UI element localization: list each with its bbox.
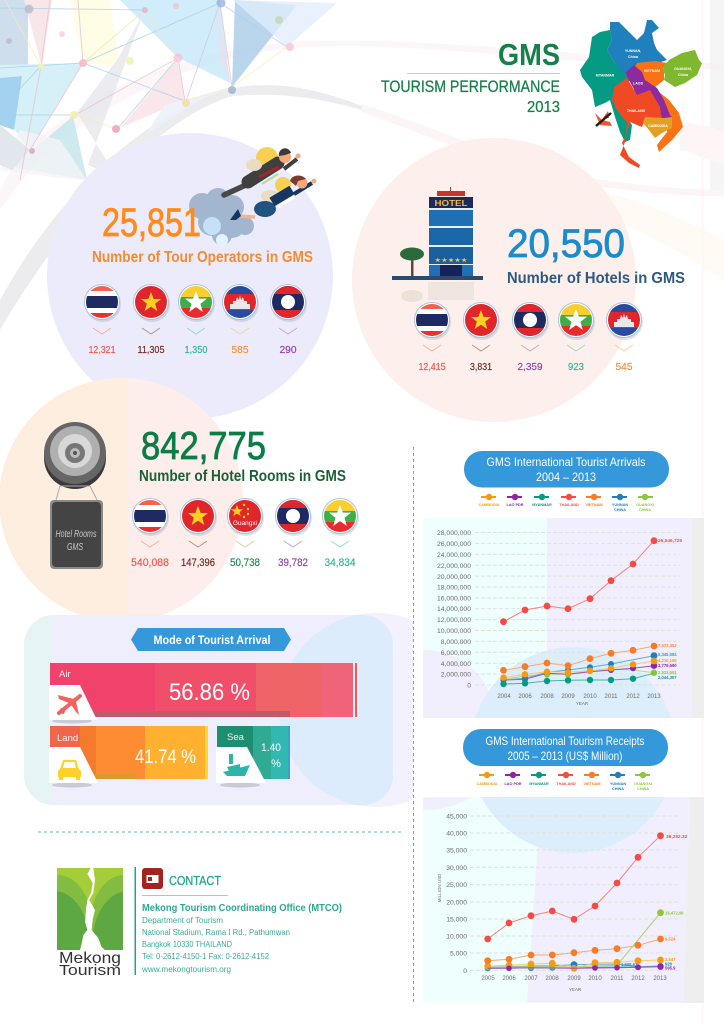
line chart: tourism receipts: 595.9 [665,966,676,970]
legend: tourist arrivals: GUANGXI [636,503,654,507]
title block: GMS [498,37,560,72]
icon: plane [58,695,80,715]
map of the GMS: CAMBODIA [648,124,668,128]
legend: tourism receipts: CHINA [612,787,624,791]
panel: contact [134,867,342,975]
line chart: tourist arrivals: 22,000,000 [437,563,471,570]
bar: land [49,726,208,788]
legend: tourism receipts [477,772,652,791]
series: Cambodia [500,658,657,681]
line chart: tourism receipts: 25,000 [446,882,467,889]
line chart: tourist arrivals: 4,210,165 [658,658,677,663]
illustration: hotel building: HOTEL [434,198,468,208]
line chart: tourist arrivals: 8,000,000 [441,639,471,646]
illustration: hanging hotel rooms sign: GMS [67,542,83,553]
line chart: tourism receipts: MILLION USD [437,873,442,902]
contact details: National Stadium, Rama I Rd., Pathumwan [142,927,290,937]
line chart: tourist arrivals: 2012 [626,694,640,700]
illustration: hanging hotel rooms sign: Hotel Rooms [56,529,96,540]
Vietnam: 11,305 [138,344,165,356]
line chart: tourist arrivals: 12,000,000 [437,617,471,624]
circle: hotels background [352,138,636,422]
line chart: tourist arrivals: YEAR [576,701,589,706]
hotel rooms total: 842,775 [141,425,266,468]
line chart: tourist arrivals: 2,000,000 [441,672,471,678]
Vietnam [180,498,217,569]
contact details: Bangkok 10330 THAILAND [142,939,232,949]
heading: tourism receipts: 2005 – 2013 (US$ Million) [508,749,622,763]
map of the GMS: VIETNAM [644,69,660,73]
logo: Mekong Tourism: Mekong [59,950,121,967]
line chart: tourism receipts: 1,608.61 [621,962,638,967]
series: Myanmar [500,673,654,687]
panel: mode of tourist arrival [24,613,413,807]
contact details [141,902,342,974]
line chart: tourist arrivals: 2,533,691 [658,670,677,675]
contact details: Tel: 0-2612-4150-1 Fax: 0-2612-4152 [142,951,269,961]
legend: tourist arrivals: MYANMAR [532,503,552,507]
panel: tour operators [84,201,313,356]
panel: tourism receipts background [423,797,704,1003]
panel: hotel rooms [131,425,359,569]
legend: tourist arrivals: CHINA [639,508,651,512]
bar: sea: Sea [227,732,245,743]
map of the GMS: LAOS [633,82,644,86]
line chart: tourist arrivals: 2013 [647,694,661,700]
Cambodia [606,302,643,373]
Laos [276,498,312,569]
line chart: tourism receipts: 2013 [653,976,667,982]
bar: land: 41.74 % [135,747,196,768]
line chart: tourism receipts: 2011 [611,976,624,982]
contact heading: CONTACT [169,873,221,888]
line chart: tourism receipts: 2009 [567,976,581,982]
title block [381,37,560,116]
contact details: Mekong Tourism Coordinating Office (MTCO) [142,902,342,914]
series: Guangxi [485,909,664,970]
line chart: tourist arrivals: 6,000,000 [441,650,471,657]
illustration: flying business people on cloud [189,147,316,246]
Laos [512,302,549,373]
map of the GMS: YUNNAN, [625,49,641,53]
line chart: tourism receipts: 5,000 [450,950,467,958]
Myanmar: 923 [568,361,584,373]
legend: tourist arrivals: LAO PDR [506,503,524,507]
hotels total: 20,550 [507,222,625,266]
line chart: tourist arrivals: 7,572,352 [658,643,677,648]
line chart: tourism receipts: 9,524 [665,936,676,942]
line chart: tourist arrivals: 2009 [561,694,575,700]
Myanmar [178,284,215,356]
series: Lao PDR [500,662,657,683]
legend: tourism receipts: LAO PDR [504,782,522,786]
circle: tour operators background [47,133,333,419]
heading: tourist arrivals: 2004 – 2013 [536,470,596,484]
legend: tourism receipts: YUNNAN [610,782,626,786]
heading: tourism receipts [463,729,668,766]
Cambodia [222,284,259,356]
legend: tourist arrivals: VIETNAM [585,503,603,507]
map of the GMS: China [628,55,639,59]
legend: tourism receipts: VIETNAM [583,782,601,786]
line chart: tourist arrivals: 3,779,690 [658,663,677,668]
bar: sea: % [271,758,281,770]
title block: TOURISM PERFORMANCE [381,78,560,96]
line chart: tourism receipts: 15,000 [446,916,467,924]
line chart: tourism receipts: 2010 [588,976,602,982]
Vietnam [464,302,500,373]
Laos: 2,359 [518,361,543,373]
legend: tourist arrivals: YUNNAN [612,503,628,507]
line chart: tourist arrivals: 0 [467,682,471,690]
line chart: tourism receipts: 2,547 [665,957,676,962]
Thailand [84,284,121,356]
line chart: tourist arrivals: 2011 [605,694,618,700]
series: Vietnam [484,936,664,964]
Guangxi: 50,738 [230,557,260,569]
line chart: tourism receipts: 39,252.32 [666,834,688,840]
legend: tourism receipts: MYANMAR [529,782,549,786]
logo: Mekong Tourism: Tourism [59,962,121,979]
map of the GMS [580,20,702,168]
Thailand: 540,088 [131,557,169,569]
bar: sea [216,726,290,788]
line chart: tourism receipts: 2012 [631,976,645,982]
line chart: tourist arrivals: 26,000,000 [437,541,471,548]
line chart: tourist arrivals: 2004 [497,694,511,700]
Cambodia: 585 [232,344,249,356]
panel: hotels [414,222,685,373]
series: Guangxi [500,666,657,682]
legend: tourism receipts: GUANGXI [634,782,652,786]
Myanmar [322,498,359,569]
line chart: tourist arrivals: 18,000,000 [437,584,471,592]
line chart: tourist arrivals: 2008 [540,694,554,700]
bar: air: Air [59,669,71,680]
heading: tourism receipts: GMS International Tourism Receipts [486,734,644,748]
line chart: tourist arrivals: 28,000,000 [437,530,471,537]
heading: tourist arrivals: GMS International Tourist Arrivals [486,455,646,469]
illustration: hotel building: ★★★★★ [434,257,468,264]
line chart: tourism receipts: 0 [463,968,467,975]
heading banner: Mode of Tourist Arrival [154,633,270,647]
series: Thailand [484,832,664,942]
series: Lao PDR [488,964,664,971]
title block: 2013 [527,99,560,116]
line chart: tourism receipts: 2006 [502,976,516,982]
Vietnam [134,284,170,356]
line chart: tourism receipts: 40,000 [446,830,467,838]
Guangxi [228,498,264,569]
contact details: Department of Tourism [142,915,223,925]
Laos: 39,782 [278,557,308,569]
illustration: hotel building [392,187,483,302]
line chart: tourism receipts: 2008 [545,976,559,982]
series: Thailand [500,537,657,625]
line chart: tourism receipts: 926 [665,962,673,966]
line chart: tourism receipts: 20,000 [446,900,467,906]
Cambodia: 545 [616,361,633,373]
line chart: tourist arrivals: 4,000,000 [441,661,471,668]
icon: contact card [142,868,163,889]
line chart: tourism receipts: 45,000 [446,814,467,820]
line chart: tourism receipts: 16,472.96 [665,910,684,916]
series: Myanmar [485,964,660,971]
line chart: tourist arrivals [437,530,682,706]
map of the GMS: GUANGXI, [674,67,692,71]
contact details: www.mekongtourism.org [141,964,231,974]
icon: ship [223,754,250,776]
icon: car [58,760,81,780]
panel: tourist arrivals background [423,518,704,718]
legend: tourist arrivals: CHINA [614,508,626,512]
Guangxi: Guangxi [233,520,257,527]
Laos [270,284,307,356]
series: Vietnam [500,643,657,674]
Myanmar: 1,350 [184,344,208,356]
illustration: hanging hotel rooms sign [44,422,106,569]
logo: Mekong Tourism [57,868,123,975]
Thailand [131,498,169,569]
line chart: tourist arrivals: 24,000,000 [437,552,471,559]
circle: hotel rooms background [0,378,243,622]
line chart: tourism receipts: 2005 [481,976,495,982]
line chart: tourist arrivals: 16,000,000 [437,596,471,602]
Myanmar [558,302,595,373]
Thailand: 12,321 [88,344,116,356]
Thailand [414,302,451,373]
series: Yunnan [488,961,664,969]
bar: land: Land [57,733,78,744]
tour operators total: 25,851 [102,201,201,245]
icon: airplane on map [595,111,612,126]
legend: tourism receipts: CAMBODIA [477,782,498,786]
tour operators heading: Number of Tour Operators in GMS [92,249,313,266]
legend: tourist arrivals: THAILAND [559,503,579,507]
bar: air [49,663,357,724]
legend: tourism receipts: CHINA [637,787,649,791]
Vietnam: 147,396 [181,557,215,569]
line chart: tourist arrivals: 5,345,084 [658,652,677,657]
series: Yunnan [500,652,657,683]
heading: tourist arrivals [464,451,669,488]
legend: tourism receipts: THAILAND [556,782,576,786]
Myanmar: 34,834 [324,557,356,569]
legend: tourist arrivals: CAMBODIA [479,503,500,507]
hotels heading: Number of Hotels in GMS [507,270,685,287]
line chart: tourist arrivals: 26,546,725 [658,538,682,544]
hotel rooms heading: Number of Hotel Rooms in GMS [139,468,346,485]
map of the GMS: China [678,73,689,77]
Laos: 290 [280,344,297,356]
bar: air: 56.86 % [169,679,250,706]
series: Cambodia [484,957,664,972]
line chart: tourist arrivals: 2006 [518,694,532,700]
Thailand: 12,415 [418,361,446,373]
map of the GMS: MYANMAR [596,74,615,78]
line chart: tourist arrivals: 14,000,000 [437,606,471,613]
line chart: tourism receipts: 35,000 [446,848,467,854]
Vietnam: 3,831 [470,361,492,373]
network lines and nodes [0,0,294,180]
map of the GMS: THAILAND [627,109,646,113]
line chart: tourist arrivals: 2,044,307 [658,675,677,680]
line chart: tourist arrivals: 2010 [583,694,597,700]
line chart: tourism receipts: 30,000 [446,865,467,872]
bar: sea: 1.40 [261,742,281,754]
line chart: tourist arrivals: 10,000,000 [437,628,471,635]
line chart: tourism receipts: 10,000 [446,934,467,940]
line chart: tourism receipts: YEAR [569,987,582,992]
line chart: tourist arrivals: 20,000,000 [437,574,471,581]
line chart: tourism receipts [437,814,688,992]
line chart: tourism receipts: 2007 [524,976,538,982]
legend: tourist arrivals [479,494,654,512]
heading banner [131,628,291,651]
network of triangles [0,0,337,180]
